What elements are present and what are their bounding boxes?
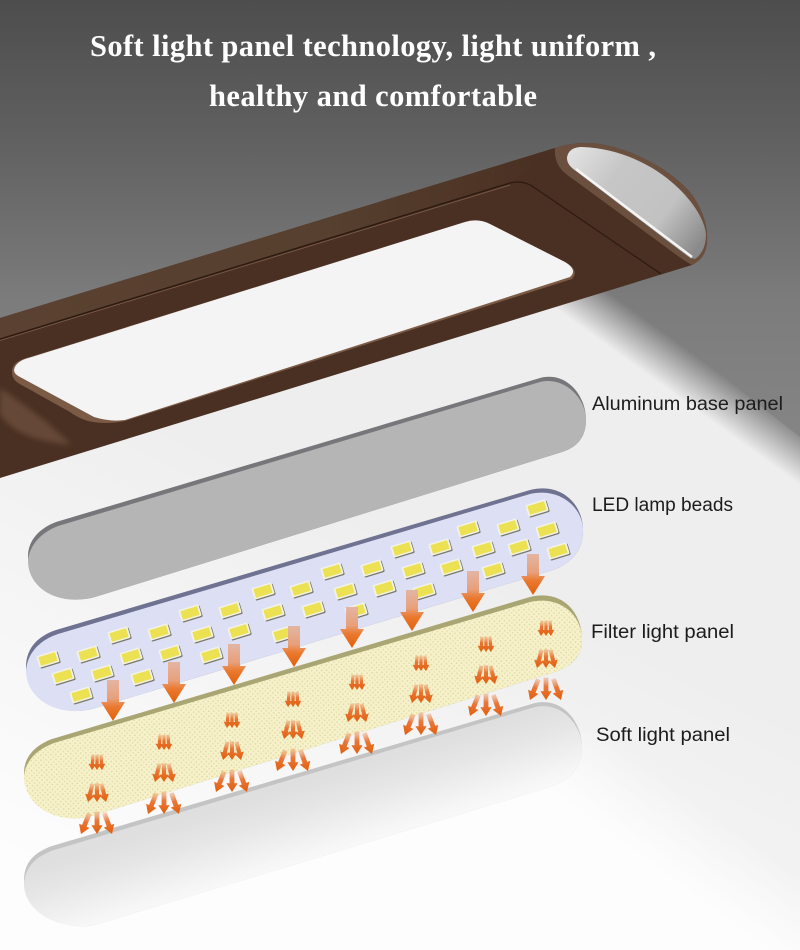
LED board <box>26 488 583 711</box>
panel: aluminum base <box>28 377 586 600</box>
title: Soft light panel technology, light uniform , <box>90 29 656 63</box>
title: healthy and comfortable <box>209 79 537 113</box>
top strip <box>0 148 555 339</box>
LED chips <box>36 499 571 705</box>
panel: filter light <box>24 595 582 818</box>
title <box>90 29 656 113</box>
arrows: LED to filter <box>101 554 545 721</box>
label: LED: LED lamp beads <box>592 495 733 516</box>
chrome highlight <box>576 169 692 257</box>
label: soft: Soft light panel <box>596 725 730 746</box>
label: aluminum: Aluminum base panel <box>592 394 783 415</box>
panel: LED beads <box>26 488 583 711</box>
inset panel edge <box>510 182 661 274</box>
chrome cap <box>567 147 706 259</box>
arrows: filter to soft panel <box>76 620 566 836</box>
corner highlight <box>0 388 72 445</box>
lamp body <box>0 143 707 478</box>
end cap ring <box>555 143 707 265</box>
light window <box>12 220 575 423</box>
lamp head <box>0 143 707 478</box>
label: filter: Filter light panel <box>591 622 734 643</box>
labels <box>591 394 783 746</box>
panel: soft light <box>24 702 582 926</box>
upper groove line <box>0 183 510 339</box>
